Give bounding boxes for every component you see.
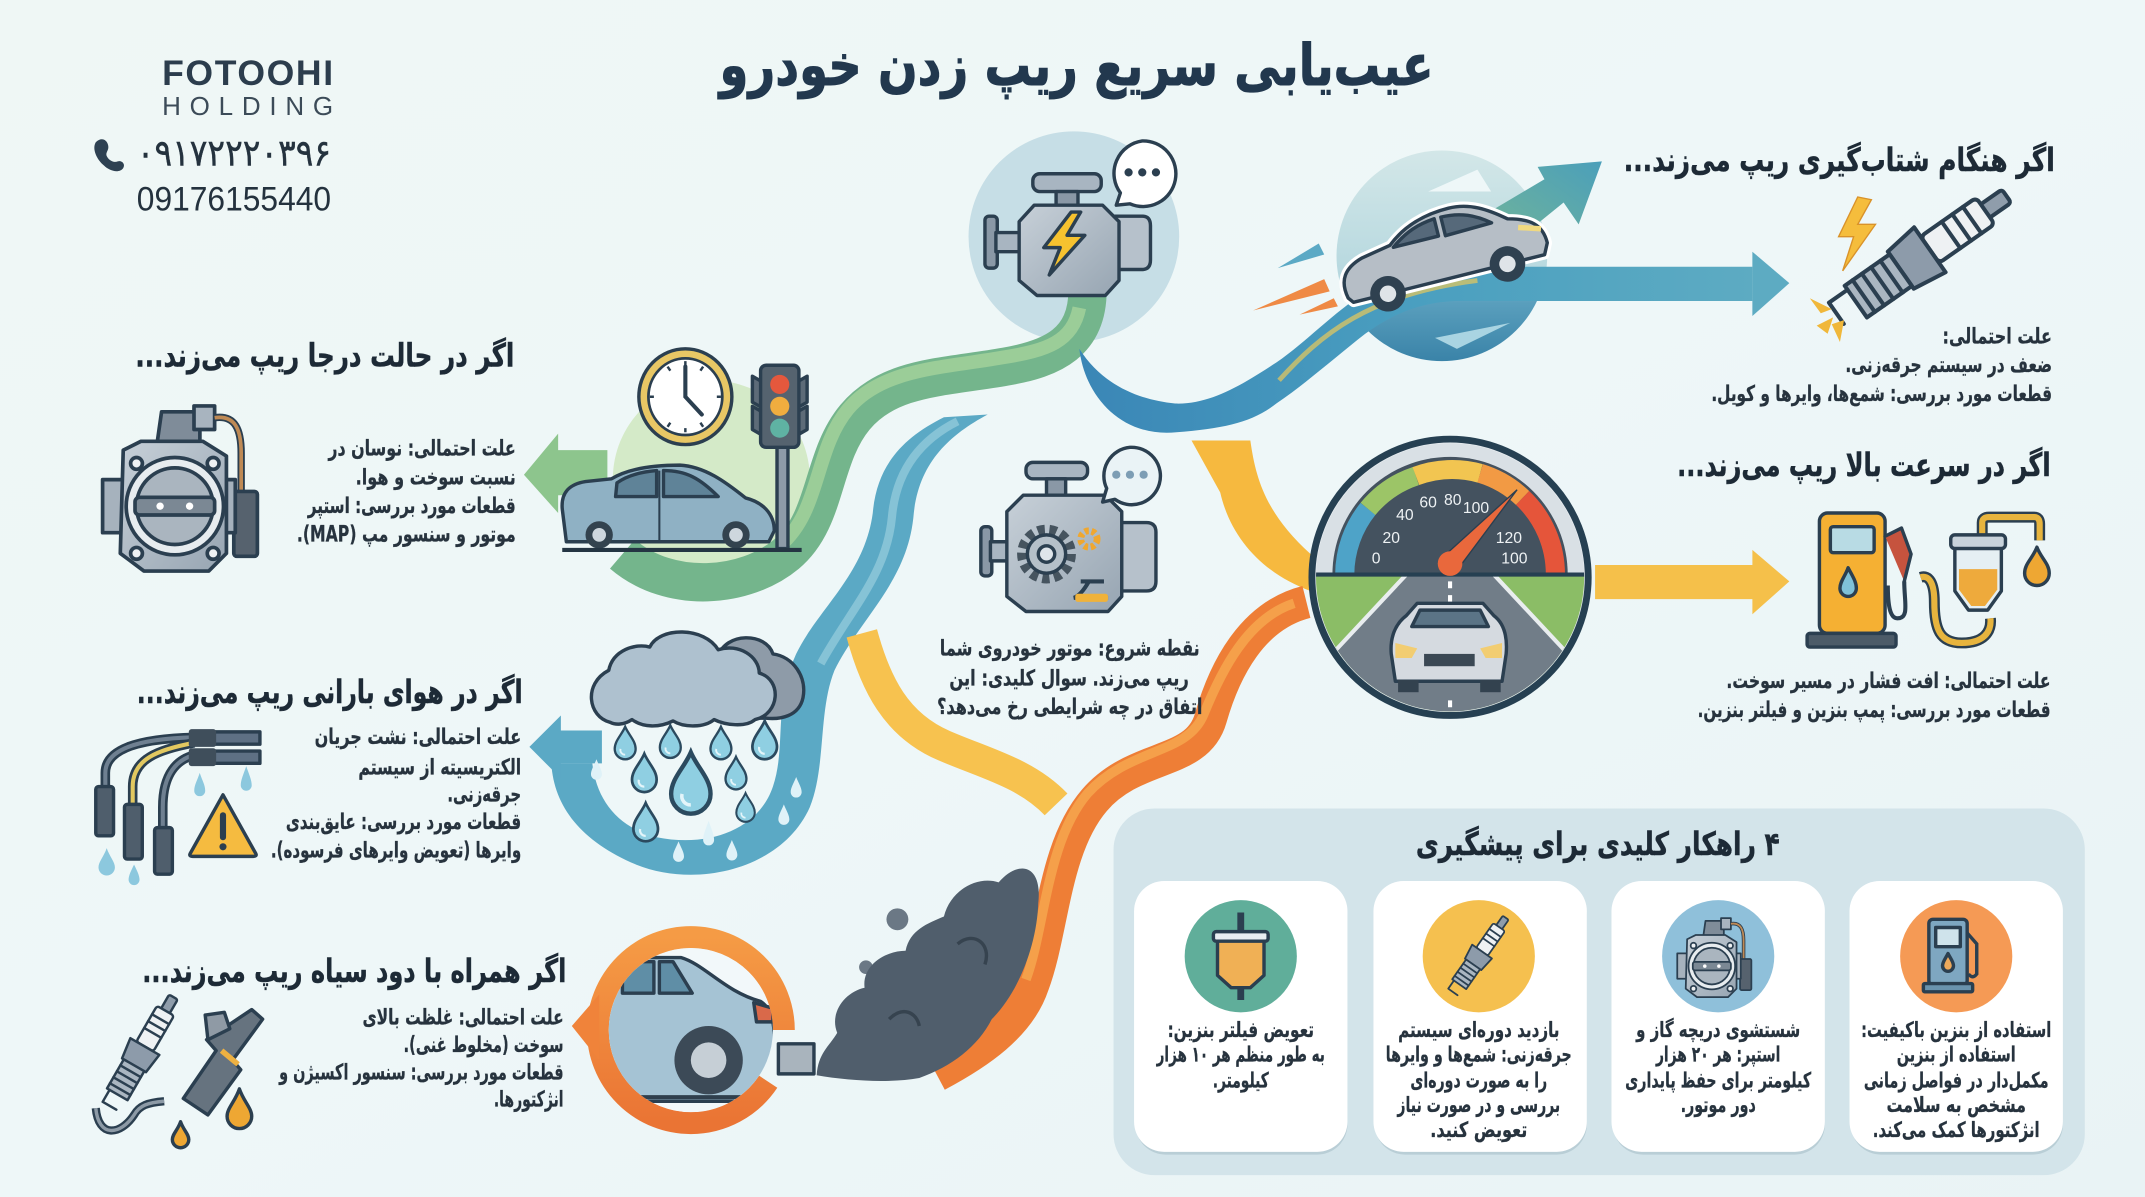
card: quality fuel: انژکتورها کمک می‌کند. — [1873, 1117, 2040, 1142]
icon: wet wires — [96, 729, 260, 885]
text: high speed cause — [1698, 669, 2051, 723]
icon: phone — [94, 139, 124, 171]
arrow: up-right growth — [1450, 161, 1602, 267]
icon: speedometer: 100 — [1501, 551, 1528, 568]
phone number latin: 09176155440 — [137, 181, 331, 219]
logo and phone numbers — [94, 53, 333, 219]
background disc: acceleration — [1337, 150, 1547, 361]
background disc: engine — [969, 131, 1179, 342]
icon: clock — [639, 349, 732, 445]
text: starting point — [937, 636, 1202, 720]
text: acceleration cause — [1711, 324, 2052, 407]
card: fuel filter — [1134, 881, 1347, 1155]
ribbon: orange to smoke — [937, 602, 1306, 1075]
icon: exhaust car in orange ring — [572, 937, 814, 1123]
icon: idle car — [562, 465, 802, 550]
card: quality fuel: مکمل‌دار در فواصل زمانی — [1864, 1068, 2049, 1093]
text: starting point: نقطه شروع: موتور خودروی شما — [940, 636, 1200, 661]
card: spark plug — [1373, 881, 1587, 1155]
icon: speedometer: 20 — [1382, 530, 1400, 547]
icon: spark plug — [1810, 174, 2022, 342]
card: throttle body: دور موتور. — [1681, 1092, 1756, 1117]
text: rain cause — [271, 725, 521, 864]
arrow: idle — [524, 434, 607, 513]
text: starting point: اتفاق در چه شرایطی رخ می‌دهد؟ — [937, 695, 1202, 720]
text: idle cause: علت احتمالی: نوسان در — [328, 437, 516, 462]
ribbon: yellow right — [1192, 440, 1311, 591]
text: black smoke cause: علت احتمالی: غلظت بالای — [363, 1006, 564, 1031]
text: black smoke cause: قطعات مورد بررسی: سنسور اکسیژن و — [278, 1060, 564, 1085]
arrow: high speed — [1595, 550, 1789, 614]
background disc: idle — [613, 380, 810, 577]
icon: speedometer: 100 — [1463, 500, 1489, 517]
card: spark plug: بازدید دوره‌ای سیستم — [1398, 1017, 1560, 1042]
heading: rain: اگر در هوای بارانی ریپ می‌زند... — [137, 673, 523, 711]
heading: prevention: ۴ راهکار کلیدی برای پیشگیری — [1416, 825, 1780, 863]
phone number persian: ۰۹۱۷۲۲۲۰۳۹۶ — [137, 132, 331, 175]
logo: Fotoohi Holding — [162, 53, 333, 121]
card: spark plug: تعویض کنید. — [1430, 1117, 1527, 1142]
heading: idle: اگر در حالت درجا ریپ می‌زند... — [135, 337, 514, 375]
card: throttle body: کیلومتر برای حفظ پایداری — [1625, 1068, 1812, 1093]
title: عیب‌یابی سریع ریپ زدن خودرو — [717, 32, 1434, 100]
heading: black smoke: اگر همراه با دود سیاه ریپ می‌زند... — [142, 952, 566, 990]
card: fuel filter: به طور منظم هر ۱۰ هزار — [1156, 1042, 1325, 1067]
logo: Fotoohi Holding: FOTOOHI — [162, 53, 333, 93]
card: quality fuel: مشخص به سلامت — [1886, 1092, 2026, 1117]
ribbon: blue to acceleration — [1079, 267, 1752, 433]
text: black smoke cause: سوخت (مخلوط غنی). — [404, 1033, 564, 1058]
card: spark plug: را به صورت دوره‌ای — [1410, 1068, 1547, 1093]
text: starting point: ریپ می‌زند. سوال کلیدی: این — [949, 666, 1189, 691]
icon: speedometer — [1306, 439, 1594, 725]
icon: speedometer: 80 — [1444, 492, 1462, 509]
icon: speedometer: 120 — [1496, 530, 1522, 547]
icon: engine with gear — [981, 462, 1156, 611]
card: throttle body: شستشوی دریچه گاز و — [1635, 1017, 1800, 1042]
text: idle cause: موتور و سنسور مپ (MAP). — [297, 523, 516, 548]
card: spark plug: جرقه‌زنی: شمع‌ها و وایرها — [1386, 1042, 1572, 1067]
card: fuel filter: کیلومتر. — [1213, 1068, 1269, 1093]
text: black smoke cause — [278, 1006, 564, 1113]
icon: speedometer: 40 — [1396, 507, 1414, 524]
logo: Fotoohi Holding: HOLDING — [162, 91, 333, 121]
card: fuel filter: تعویض فیلتر بنزین: — [1168, 1017, 1314, 1042]
icon: rain cloud — [591, 632, 804, 862]
text: idle cause: نسبت سوخت و هوا. — [356, 465, 516, 490]
text: idle cause: قطعات مورد بررسی: استپر — [307, 494, 516, 519]
arrow: rain — [529, 715, 602, 778]
ribbon: blue to rain — [551, 415, 988, 875]
text: rain cause: الکتریسیته از سیستم — [358, 755, 521, 780]
card: throttle body — [1611, 881, 1825, 1155]
icon: spark plug and injector — [96, 989, 263, 1148]
card: quality fuel: استفاده از بنزین — [1897, 1042, 2016, 1067]
icon: accelerating car — [1253, 187, 1554, 321]
card: quality fuel: استفاده از بنزین باکیفیت: — [1861, 1017, 2051, 1042]
card: spark plug: بررسی و در صورت نیاز — [1397, 1092, 1560, 1117]
icon: traffic light — [752, 365, 807, 549]
text: idle cause — [297, 437, 516, 548]
card: quality fuel — [1850, 881, 2063, 1155]
card: throttle body: استپر: هر ۲۰ هزار — [1655, 1042, 1780, 1067]
text: acceleration cause: ضعف در سیستم جرقه‌زنی. — [1845, 353, 2052, 378]
text: black smoke cause: انژکتورها. — [494, 1088, 564, 1113]
icon: fuel pump and filter — [1807, 513, 2049, 647]
car front — [1391, 603, 1506, 681]
icon: throttle body — [103, 406, 257, 571]
arrow: acceleration — [1752, 252, 1789, 316]
icon: engine with lightning — [985, 174, 1150, 295]
ribbon: green to idle — [622, 290, 1088, 582]
text: rain cause: وایرها (تعویض وایرهای فرسوده). — [271, 839, 521, 864]
text: acceleration cause: علت احتمالی: — [1943, 324, 2052, 349]
ribbon: yellow left — [862, 633, 1056, 804]
speed lines — [1253, 279, 1338, 315]
text: rain cause: جرقه‌زنی. — [447, 783, 521, 808]
panel: prevention — [1114, 808, 2085, 1175]
icon: speedometer: 0 — [1372, 551, 1381, 568]
icon: speedometer: 60 — [1419, 495, 1437, 512]
icon: speech bubble — [1114, 141, 1176, 207]
icon: light speech bubble — [1103, 447, 1160, 505]
text: rain cause: قطعات مورد بررسی: عایق‌بندی — [286, 810, 521, 835]
text: rain cause: علت احتمالی: نشت جریان — [315, 725, 521, 750]
icon: black smoke — [817, 868, 1039, 1081]
